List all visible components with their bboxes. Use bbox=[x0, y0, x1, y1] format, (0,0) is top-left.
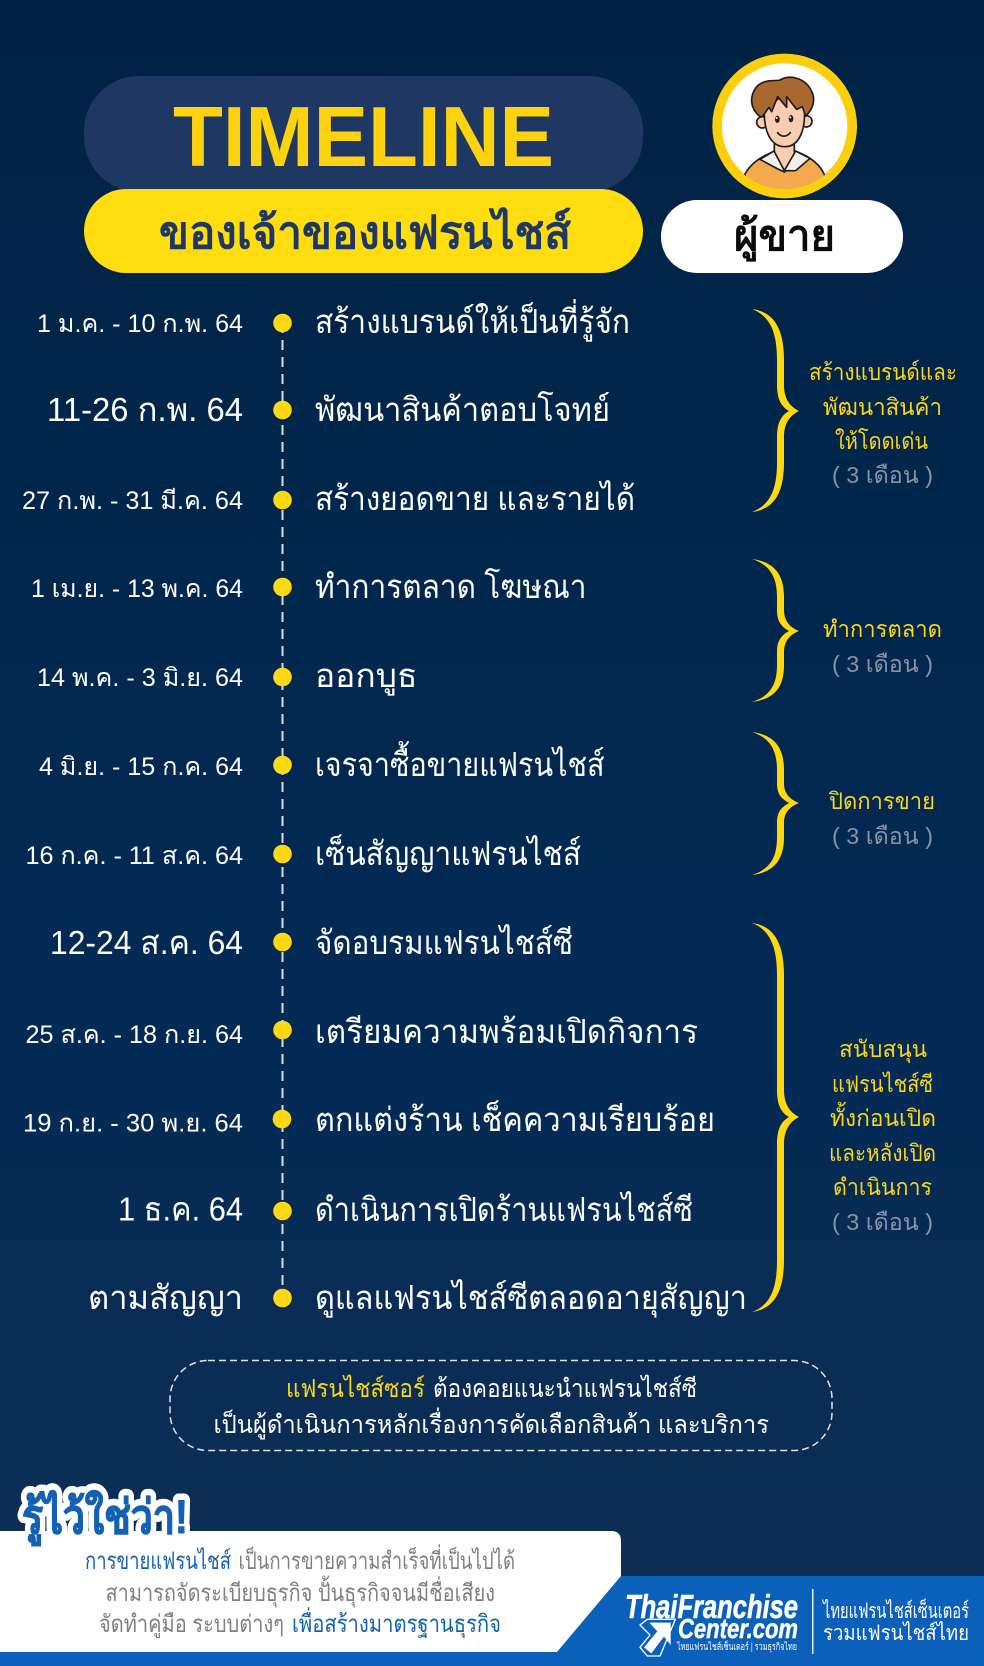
task labels: จัดอบรมแฟรนไชส์ซี bbox=[315, 924, 573, 961]
phase 1 label: พัฒนาสินค้า bbox=[823, 394, 942, 420]
subtitle pill: ของเจ้าของแฟรนไชส์ bbox=[159, 206, 572, 258]
phase 2 label: ทำการตลาด bbox=[823, 616, 942, 642]
phase 4 label: แฟรนไชส์ซี bbox=[832, 1071, 933, 1097]
task labels: เตรียมความพร้อมเปิดกิจการ bbox=[315, 1013, 698, 1050]
role pill: seller: ผู้ขาย bbox=[734, 212, 835, 262]
logo: ThaiFranchise Center bbox=[625, 1588, 798, 1656]
callout: franchisor note: ต้องคอยแนะนำแฟรนไชส์ซี bbox=[433, 1374, 697, 1403]
date labels: 11-26 ก.พ. 64 bbox=[47, 391, 243, 428]
panel: did you know: การขายแฟรนไชส์ bbox=[85, 1547, 231, 1575]
phase 1 label: สร้างแบรนด์และ bbox=[809, 359, 957, 385]
phase 3 label: ( 3 เดือน ) bbox=[832, 823, 933, 849]
logo: ThaiFranchise Center: ThaiFranchise bbox=[625, 1588, 798, 1625]
date labels: 16 ก.ค. - 11 ส.ค. 64 bbox=[26, 842, 243, 870]
phase 3 label: ปิดการขาย bbox=[828, 788, 935, 814]
task labels: ดูแลแฟรนไชส์ซีตลอดอายุสัญญา bbox=[315, 1279, 747, 1318]
phase 2 label: ( 3 เดือน ) bbox=[832, 651, 933, 677]
date labels: ตามสัญญา bbox=[88, 1279, 243, 1316]
icon: seller avatar bbox=[712, 54, 857, 198]
task labels: ตกแต่งร้าน เช็คความเรียบร้อย bbox=[315, 1100, 715, 1138]
task labels: ดำเนินการเปิดร้านแฟรนไชส์ซี bbox=[315, 1191, 693, 1228]
brace: phase 4 bbox=[752, 923, 799, 1312]
task labels: ทำการตลาด โฆษณา bbox=[315, 568, 586, 605]
date labels bbox=[22, 310, 243, 1316]
task labels: ออกบูธ bbox=[315, 657, 418, 696]
phase 4 label bbox=[829, 1036, 936, 1235]
subtitle pill bbox=[84, 189, 643, 273]
task labels: สร้างยอดขาย และรายได้ bbox=[315, 480, 635, 517]
phase 1 label: ให้โดดเด่น bbox=[835, 428, 928, 454]
panel: did you know: เป็นการขายความสำเร็จที่เป็นไปได้ bbox=[238, 1544, 515, 1575]
brace: phase 2 bbox=[752, 559, 799, 702]
title pill: TIMELINE: TIMELINE bbox=[173, 90, 554, 185]
tagline bbox=[822, 1597, 969, 1645]
heading: did you know: รู้ไว้ใช่ว่า! bbox=[22, 1489, 188, 1547]
date labels: 19 ก.ย. - 30 พ.ย. 64 bbox=[23, 1110, 243, 1138]
phase 3 label bbox=[828, 788, 935, 849]
task labels bbox=[315, 299, 747, 1318]
timeline axis bbox=[273, 314, 292, 1307]
panel: did you know: จัดทำคู่มือ ระบบต่างๆ bbox=[99, 1611, 284, 1639]
role pill: seller bbox=[661, 200, 903, 273]
panel: did you know: เพื่อสร้างมาตรฐานธุรกิจ bbox=[292, 1607, 501, 1639]
date labels: 12-24 ส.ค. 64 bbox=[50, 924, 243, 961]
callout: franchisor note: แฟรนไชส์ซอร์ bbox=[286, 1374, 425, 1403]
phase 4 label: สนับสนุน bbox=[839, 1036, 927, 1063]
date labels: 1 ม.ค. - 10 ก.พ. 64 bbox=[37, 310, 243, 338]
task labels: เซ็นสัญญาแฟรนไชส์ bbox=[315, 834, 581, 872]
divider bbox=[812, 1589, 814, 1654]
panel: did you know: สามารถจัดระเบียบธุรกิจ ปั้นธุรกิจจนมีชื่อเสียง bbox=[106, 1575, 495, 1608]
phase 4 label: และหลังเปิด bbox=[829, 1140, 936, 1166]
phase 2 label bbox=[823, 616, 942, 677]
logo: ThaiFranchise Center: Center.com bbox=[678, 1613, 798, 1644]
callout: franchisor note: เป็นผู้ดำเนินการหลักเรื่องการคัดเลือกสินค้า และบริการ bbox=[214, 1407, 769, 1440]
panel: did you know bbox=[0, 1531, 621, 1652]
date labels: 4 มิ.ย. - 15 ก.ค. 64 bbox=[39, 753, 243, 781]
phase 1 label bbox=[809, 359, 957, 488]
task labels: เจรจาซื้อขายแฟรนไชส์ bbox=[315, 741, 604, 783]
task labels: พัฒนาสินค้าตอบโจทย์ bbox=[315, 391, 610, 428]
date labels: 27 ก.พ. - 31 มี.ค. 64 bbox=[22, 487, 243, 515]
footer band bbox=[0, 1576, 984, 1666]
heading: did you know: รู้ไว้ใช่ว่า! bbox=[22, 1489, 188, 1547]
date labels: 1 ธ.ค. 64 bbox=[118, 1190, 243, 1228]
callout: franchisor note bbox=[170, 1360, 832, 1450]
task labels: สร้างแบรนด์ให้เป็นที่รู้จัก bbox=[315, 299, 630, 342]
date labels: 14 พ.ค. - 3 มิ.ย. 64 bbox=[37, 664, 243, 692]
brace: phase 1 bbox=[752, 309, 799, 512]
phase 4 label: ทั้งก่อนเปิด bbox=[830, 1102, 936, 1131]
logo: ThaiFranchise Center: ไทยแฟรนไชส์เซ็นเตอร์ | รวมธุรกิจไทย bbox=[676, 1639, 797, 1653]
title pill: TIMELINE bbox=[84, 76, 643, 192]
phase 1 label: ( 3 เดือน ) bbox=[832, 462, 933, 488]
phase 4 label: ( 3 เดือน ) bbox=[832, 1209, 933, 1235]
tagline: รวมแฟรนไชส์ไทย bbox=[823, 1621, 969, 1645]
date labels: 1 เม.ย. - 13 พ.ค. 64 bbox=[31, 575, 243, 603]
phase 4 label: ดำเนินการ bbox=[833, 1174, 932, 1200]
brace: phase 3 bbox=[752, 732, 799, 875]
date labels: 25 ส.ค. - 18 ก.ย. 64 bbox=[26, 1021, 243, 1049]
